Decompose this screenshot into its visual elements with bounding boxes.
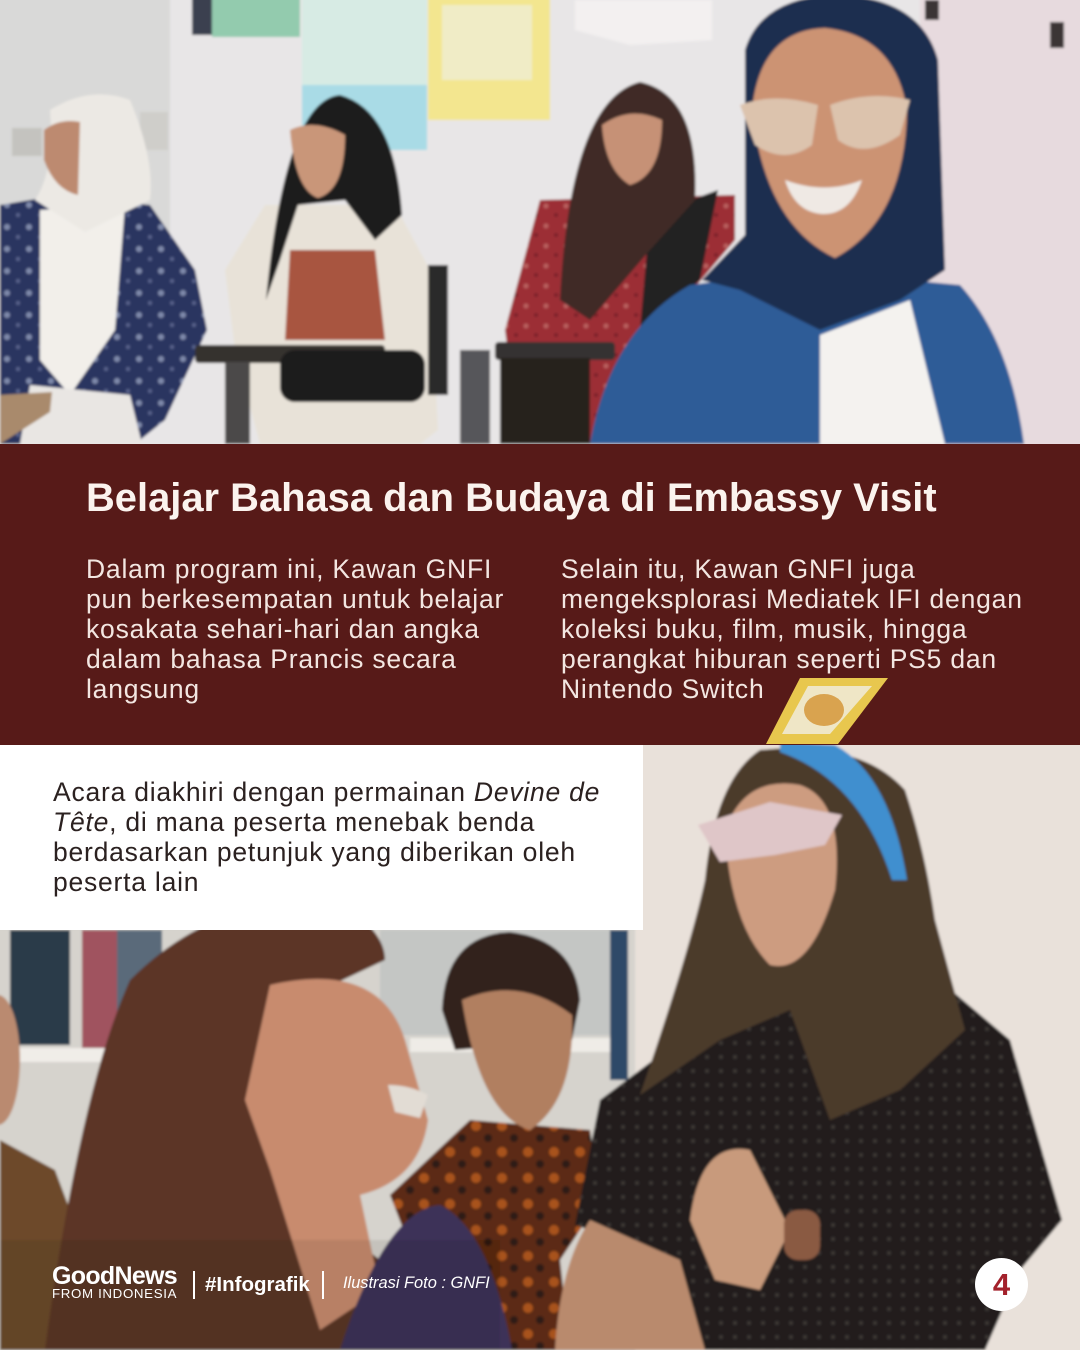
photo: guessing game participants: [0, 745, 1080, 1350]
page number badge: 4: [993, 1267, 1010, 1302]
text block: caption: Tête, di mana peserta menebak benda: [53, 807, 535, 837]
logo: GoodNews from Indonesia: GoodNews: [52, 1262, 177, 1290]
text block: right column: koleksi buku, film, musik, hingga: [561, 614, 967, 644]
text block: caption: [53, 777, 600, 897]
panel: maroon text band: [0, 444, 1080, 745]
photo credit: Ilustrasi Foto : GNFI: [343, 1274, 490, 1292]
text block: right column: Nintendo Switch: [561, 674, 764, 704]
heading: Belajar Bahasa dan Budaya di Embassy Visit: [86, 476, 937, 520]
text block: right column: perangkat hiburan seperti PS5 dan: [561, 644, 997, 674]
logo: GoodNews from Indonesia: FROM INDONESIA: [52, 1286, 177, 1301]
text block: left column: Dalam program ini, Kawan GNFI: [86, 554, 492, 584]
page number badge: [975, 1258, 1028, 1311]
text block: left column: pun berkesempatan untuk belajar: [86, 584, 504, 614]
text block: left column: langsung: [86, 674, 200, 704]
text block: caption: peserta lain: [53, 867, 199, 897]
text block: left column: kosakata sehari-hari dan angka: [86, 614, 480, 644]
panel: white caption box: [0, 745, 643, 930]
text block: left column: [86, 554, 504, 704]
text block: left column: dalam bahasa Prancis secara: [86, 644, 457, 674]
hashtag: #Infografik: [205, 1273, 310, 1296]
text block: right column: Selain itu, Kawan GNFI juga: [561, 554, 916, 584]
photo: students seated in classroom: [0, 0, 1080, 444]
text block: right column: [561, 554, 1023, 704]
text block: right column: mengeksplorasi Mediatek IFI dengan: [561, 584, 1023, 614]
icon: yellow guessing card: [766, 678, 888, 744]
footer: logo and credits: [52, 1262, 490, 1301]
text block: caption: berdasarkan petunjuk yang diberikan oleh: [53, 837, 576, 867]
text block: caption: Acara diakhiri dengan permainan Devine de: [53, 777, 600, 807]
photo credit: [322, 1271, 490, 1299]
